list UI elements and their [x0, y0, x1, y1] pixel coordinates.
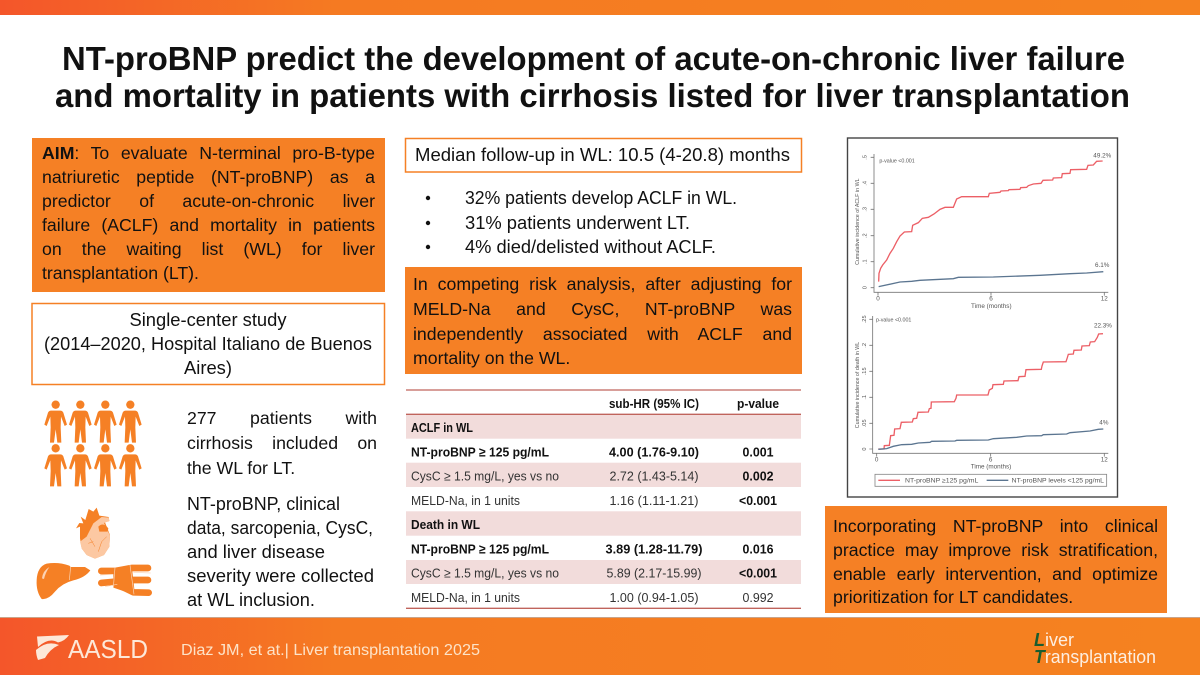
- text: patients included: [187, 408, 377, 478]
- chart: cumulative incidence of ACLF: [855, 152, 1112, 310]
- panel: conclusion: enable early intervention, and optimize: [833, 564, 1158, 584]
- logo: AASLD: [36, 634, 148, 664]
- table: sub-HR results: 0.016: [742, 542, 774, 556]
- panel: median follow-up: Median follow-up in WL: 10.5 (4-20.8) months: [415, 145, 790, 165]
- table: sub-HR results: 1.16 (1.11-1.21): [610, 493, 698, 508]
- table: sub-HR results: 1.00 (0.94-1.05): [610, 590, 698, 605]
- chart: cumulative incidence of death: Time (months): [971, 464, 1011, 471]
- icon: group of patients: [44, 400, 142, 486]
- panel: aim: transplantation (LT).: [42, 263, 199, 283]
- logo: Liver Transplantation: Liver: [1034, 630, 1074, 650]
- panel: aim: AIM: To evaluate N-terminal pro-B-type: [42, 143, 375, 163]
- chart: cumulative incidence of ACLF: 0: [876, 296, 880, 303]
- panel: cumulative incidence charts: [848, 138, 1118, 497]
- text: patients included: the WL for LT.: [187, 458, 295, 478]
- chart: cumulative incidence of ACLF: Cumulative incidence of ACLF in WL: [855, 178, 861, 265]
- text: data collected: NT-proBNP, clinical: [187, 494, 340, 514]
- title: [55, 40, 1130, 114]
- chart: cumulative incidence of ACLF: 49.2%: [1093, 152, 1112, 159]
- citation: Diaz JM, et at.| Liver transplantation 2025: [181, 642, 480, 659]
- panel: study design: Single-center study: [130, 310, 286, 330]
- panel: aim: failure (ACLF) and mortality in patients: [42, 215, 375, 235]
- panel: aim: [32, 138, 385, 292]
- title: and mortality in patients with cirrhosis listed for liver transplantation: [55, 77, 1130, 114]
- table: sub-HR results: p-value: [737, 396, 779, 411]
- chart: cumulative incidence of death: .2: [862, 343, 868, 348]
- chart: cumulative incidence of ACLF: .3: [863, 207, 869, 212]
- table: sub-HR results: NT-proBNP ≥ 125 pg/mL: [411, 542, 549, 556]
- chart: cumulative incidence of death: 0: [862, 447, 868, 451]
- panel: conclusion: [825, 506, 1167, 613]
- panel: median follow-up: [406, 138, 802, 172]
- text: data collected: at WL inclusion.: [187, 590, 315, 610]
- panel: aim: on the waiting list (WL) for liver: [42, 239, 375, 259]
- chart: cumulative incidence of death: .15: [862, 367, 868, 375]
- table: sub-HR results: MELD-Na, in 1 units: [411, 590, 520, 605]
- table: sub-HR results: CysC ≥ 1.5 mg/L, yes vs no: [411, 468, 559, 484]
- bullet list: outcomes: 31% patients underwent LT.: [465, 213, 690, 233]
- table: sub-HR results: 0.001: [742, 444, 774, 460]
- chart: cumulative incidence of death: .05: [862, 419, 868, 427]
- logo: AASLD: AASLD: [68, 634, 148, 664]
- chart: cumulative incidence of death: 12: [1101, 456, 1108, 463]
- panel: conclusion: Incorporating NT-proBNP into clinical: [833, 516, 1158, 536]
- table: sub-HR results: 4.00 (1.76-9.10): [609, 444, 699, 460]
- table: sub-HR results: MELD-Na, in 1 units: [411, 493, 520, 508]
- legend: NT-proBNP ≥125 pg/mL: [905, 477, 979, 484]
- panel: competing risk analysis: MELD-Na and CysC, NT-proBNP was: [413, 299, 792, 319]
- chart: cumulative incidence of ACLF: 6: [989, 296, 993, 303]
- chart: cumulative incidence of death: [855, 315, 1112, 486]
- panel: competing risk analysis: In competing risk analysis, after adjusting for: [413, 274, 792, 294]
- panel: conclusion: prioritization for LT candidates.: [833, 587, 1073, 607]
- chart: cumulative incidence of death: .1: [862, 395, 868, 400]
- chart: cumulative incidence of death: 0: [875, 456, 879, 463]
- panel: aim: predictor of acute-on-chronic liver: [42, 191, 375, 211]
- chart: cumulative incidence of ACLF: 12: [1101, 296, 1108, 303]
- chart: cumulative incidence of death: .25: [862, 315, 868, 323]
- text: data collected: data, sarcopenia, CysC,: [187, 518, 373, 538]
- table: sub-HR results: sub-HR (95% IC): [609, 396, 699, 411]
- bullet list: outcomes: [426, 188, 737, 257]
- table: sub-HR results: <0.001: [739, 566, 777, 580]
- chart: cumulative incidence of ACLF: .1: [863, 259, 869, 264]
- chart: cumulative incidence of ACLF: 6.1%: [1095, 262, 1110, 269]
- icon: heart, liver and muscle: [37, 508, 151, 599]
- table: sub-HR results: <0.001: [739, 493, 777, 508]
- panel: competing risk analysis: mortality on the WL.: [413, 348, 570, 368]
- table: sub-HR results: 3.89 (1.28-11.79): [606, 542, 702, 556]
- table: sub-HR results: 2.72 (1.43-5.14): [610, 468, 698, 484]
- table: sub-HR results: 0.992: [742, 590, 774, 605]
- panel: competing risk analysis: independently associated with ACLF and: [413, 324, 792, 344]
- panel: aim: natriuretic peptide (NT-proBNP) as a: [42, 167, 375, 187]
- panel: study design: Aires): [184, 358, 232, 378]
- chart: cumulative incidence of ACLF: .2: [863, 233, 869, 238]
- footer band: [0, 617, 1200, 675]
- chart: cumulative incidence of ACLF: .5: [863, 155, 869, 160]
- chart: cumulative incidence of death: 4%: [1099, 419, 1109, 426]
- panel: study design: [32, 304, 384, 384]
- top banner: [0, 0, 1200, 15]
- chart: cumulative incidence of death: Cumulative incidence of death in WL: [855, 342, 861, 428]
- table: sub-HR results: 5.89 (2.17-15.99): [606, 566, 702, 580]
- chart: cumulative incidence of death: 6: [989, 456, 993, 463]
- bullet list: outcomes: 32% patients develop ACLF in WL.: [465, 188, 737, 208]
- table: sub-HR results: [406, 390, 801, 608]
- text: patients included: cirrhosis included on: [187, 433, 377, 453]
- bullet list: outcomes: 4% died/delisted without ACLF.: [465, 237, 716, 257]
- logo: Liver Transplantation: Transplantation: [1034, 647, 1156, 667]
- panel: study design: (2014–2020, Hospital Italiano de Buenos: [44, 334, 372, 354]
- chart: cumulative incidence of ACLF: 0: [863, 286, 869, 289]
- chart: cumulative incidence of ACLF: Time (months): [971, 303, 1012, 310]
- panel: conclusion: practice may improve risk stratification,: [833, 540, 1158, 560]
- table: sub-HR results: Death in WL: [411, 517, 480, 532]
- table: sub-HR results: CysC ≥ 1.5 mg/L, yes vs no: [411, 566, 559, 580]
- chart: cumulative incidence of ACLF: .4: [863, 181, 869, 186]
- chart: cumulative incidence of ACLF: p-value <0.001: [879, 158, 915, 164]
- title: NT-proBNP predict the development of acute-on-chronic liver failure: [62, 40, 1125, 77]
- chart: cumulative incidence of death: 22.3%: [1094, 322, 1112, 329]
- text: data collected: severity were collected: [187, 566, 374, 586]
- table: sub-HR results: NT-proBNP ≥ 125 pg/mL: [411, 444, 549, 460]
- panel: competing risk analysis: [405, 267, 802, 374]
- chart: cumulative incidence of death: p-value <0.001: [876, 318, 911, 324]
- table: sub-HR results: ACLF in WL: [411, 420, 473, 435]
- logo: Liver Transplantation: [1034, 630, 1156, 667]
- text: data collected: [187, 494, 374, 610]
- text: patients included: 277 patients with: [187, 408, 377, 428]
- legend: [875, 474, 1107, 486]
- legend: NT-proBNP levels <125 pg/mL: [1012, 477, 1104, 484]
- text: data collected: and liver disease: [187, 542, 325, 562]
- table: sub-HR results: 0.002: [742, 468, 774, 484]
